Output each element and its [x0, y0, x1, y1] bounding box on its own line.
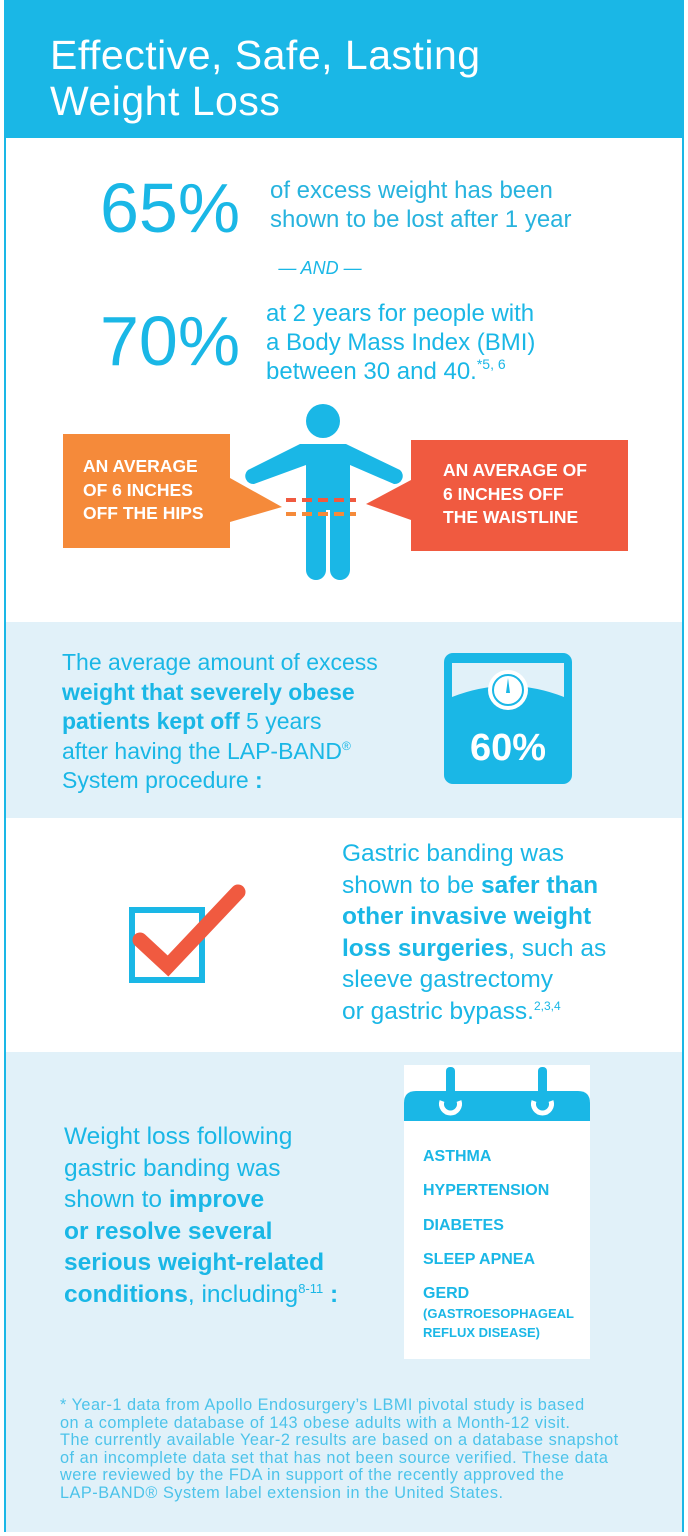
stat 65%: 65%: [100, 169, 240, 247]
stat 65%: [100, 169, 572, 247]
stat 70%: 70%: [100, 302, 240, 380]
calendar: (GASTROESOPHAGEAL: [423, 1306, 574, 1321]
figure with callouts: OFF THE HIPS: [83, 503, 204, 523]
footnote: were reviewed by the FDA in support of the recently approved the: [60, 1466, 564, 1484]
calendar: HYPERTENSION: [423, 1182, 549, 1199]
panel: 5 year: [6, 622, 682, 818]
calendar: REFLUX DISEASE): [423, 1325, 540, 1340]
text: safer: loss surgeries, such as: [342, 934, 606, 962]
footnote: [60, 1396, 619, 1502]
figure with callouts: AN AVERAGE: [83, 456, 198, 476]
panel: 5 year: after having the LAP-BAND®: [62, 738, 351, 764]
panel: 5 year: weight that severely obese: [62, 678, 355, 704]
callout: hips: [63, 434, 282, 548]
header: Effective, Safe, Lasting: [50, 32, 481, 78]
panel: 5 year: The average amount of excess: [62, 649, 378, 675]
panel: conditions: [6, 1052, 682, 1532]
panel: conditions: gastric banding was: [64, 1155, 281, 1182]
icon: body: [245, 404, 403, 580]
text: safer: sleeve gastrectomy: [342, 966, 553, 993]
panel: conditions: or resolve several: [64, 1218, 272, 1245]
stat 65%: shown to be lost after 1 year: [270, 206, 572, 233]
panel: 5 year: System procedure :: [62, 767, 263, 793]
callout: waistline: [366, 440, 628, 551]
header: Weight Loss: [50, 78, 280, 124]
text: safer: shown to be safer than: [342, 872, 598, 898]
calendar: [404, 1065, 590, 1359]
and divider: — AND —: [278, 258, 362, 278]
icon: scale 60%: [444, 653, 572, 784]
panel: 5 year: patients kept off 5 years: [62, 708, 321, 734]
footnote: of an incomplete data set that has not been source verified. These data: [60, 1448, 608, 1466]
icon: checkbox: [129, 884, 246, 983]
calendar: SLEEP APNEA: [423, 1251, 535, 1268]
text: safer: or gastric bypass.2,3,4: [342, 998, 561, 1024]
text: safer: [342, 840, 606, 1024]
footnote: on a complete database of 143 obese adults with a Month-12 visit.: [60, 1414, 570, 1432]
figure with callouts: [63, 404, 628, 580]
footnote: LAP-BAND® System label extension in the United States.: [60, 1484, 504, 1502]
header: [4, 0, 684, 138]
stat 70%: at 2 years for people with: [266, 300, 534, 327]
text: safer: Gastric banding was: [342, 840, 564, 867]
icon: scale 60%: 60%: [470, 727, 546, 769]
panel: conditions: Weight loss following: [64, 1123, 292, 1150]
footnote: * Year-1 data from Apollo Endosurgery’s LBMI pivotal study is based: [60, 1396, 585, 1414]
figure with callouts: 6 INCHES OFF: [443, 484, 564, 504]
panel: conditions: shown to improve: [64, 1186, 264, 1213]
footnote: The currently available Year-2 results are based on a database snapshot: [60, 1431, 619, 1449]
stat 70%: [100, 300, 535, 385]
panel: conditions: serious weight-related: [64, 1249, 324, 1276]
text: safer: other invasive weight: [342, 903, 591, 930]
figure with callouts: THE WAISTLINE: [443, 507, 578, 527]
stat 70%: between 30 and 40.*5, 6: [266, 356, 506, 385]
stat 70%: a Body Mass Index (BMI): [266, 329, 535, 356]
stat 65%: of excess weight has been: [270, 177, 553, 204]
calendar: ASTHMA: [423, 1148, 491, 1165]
figure with callouts: AN AVERAGE OF: [443, 460, 587, 480]
figure with callouts: OF 6 INCHES: [83, 480, 193, 500]
panel: conditions: conditions, including8-11 :: [64, 1281, 338, 1308]
calendar: GERD: [423, 1285, 469, 1302]
calendar: DIABETES: [423, 1217, 504, 1234]
